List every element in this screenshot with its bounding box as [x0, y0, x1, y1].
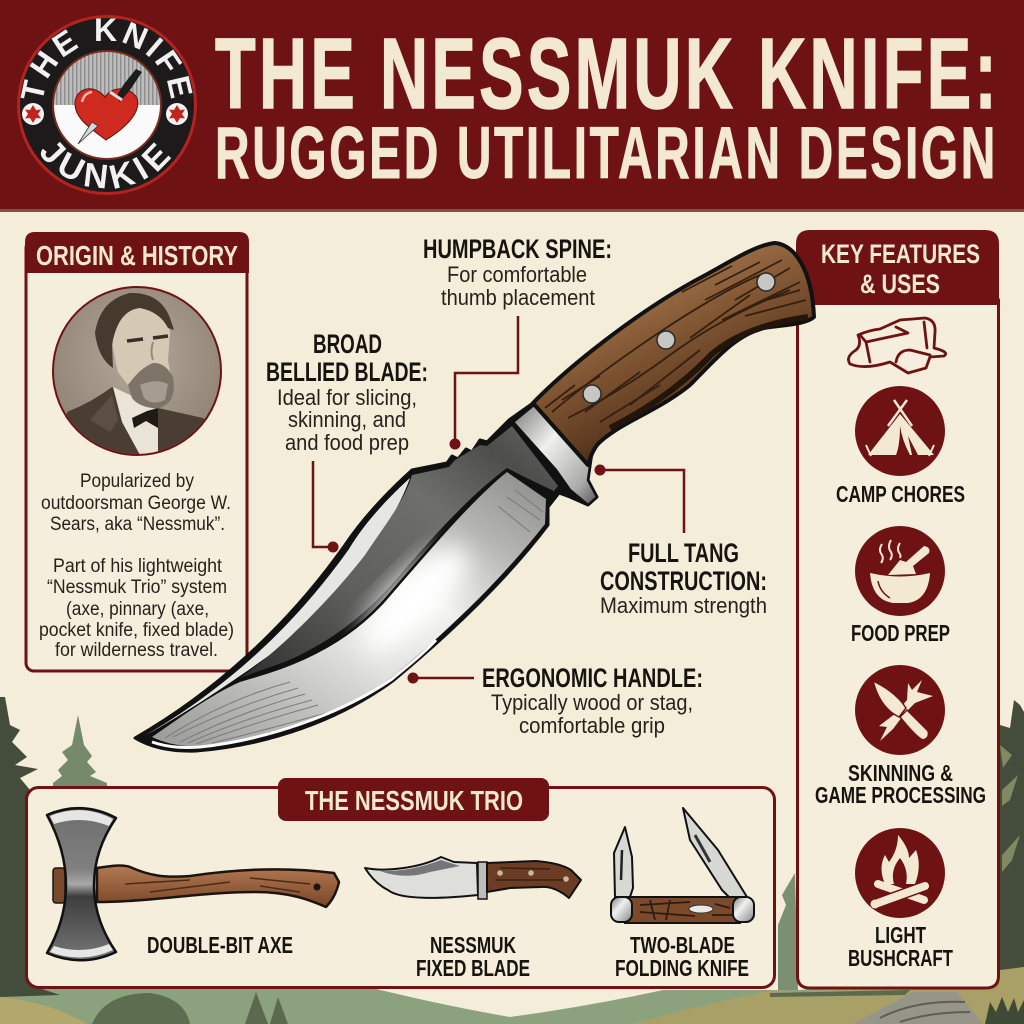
callout: humpback spine: thumb placement — [441, 285, 595, 310]
portrait of George W. Sears — [50, 284, 224, 460]
nessmuk fixed blade — [365, 857, 581, 899]
labels: trio: DOUBLE-BIT AXE — [147, 932, 293, 958]
label: camp chores: CAMP CHORES — [836, 481, 965, 507]
origin text: Popularized by — [80, 471, 194, 492]
panel: the Nessmuk trio — [26, 778, 774, 988]
origin text: “Nessmuk Trio” system — [47, 577, 227, 598]
panel: key features and uses: & USES — [860, 269, 940, 299]
label: food prep: FOOD PREP — [851, 620, 950, 646]
labels: trio: NESSMUK — [430, 932, 516, 958]
callout: broad bellied blade: BROAD — [313, 329, 382, 359]
wood handle — [533, 243, 814, 465]
callout: full tang construction: Maximum strength — [600, 593, 767, 618]
callout: ergonomic handle: Typically wood or stag, — [491, 690, 693, 715]
origin text — [39, 471, 234, 661]
callout: full tang construction — [594, 464, 767, 618]
callout: humpback spine — [423, 234, 612, 450]
origin text: outdoorsman George W. — [41, 493, 231, 514]
label: light bushcraft: BUSHCRAFT — [848, 945, 953, 971]
bright lower bevel — [152, 472, 546, 746]
callout: broad bellied blade: skinning, and — [288, 407, 406, 432]
callout: broad bellied blade: BELLIED BLADE: — [266, 357, 428, 387]
logo: The Knife Junkie: THE KNIFE — [20, 18, 192, 98]
callout: humpback spine: HUMPBACK SPINE: — [423, 234, 612, 264]
rivets — [583, 273, 775, 403]
callout: broad bellied blade — [266, 329, 428, 552]
panel: origin and history — [25, 232, 249, 671]
heading: key features: KEY FEATURES — [821, 239, 980, 269]
callout: ergonomic handle — [408, 663, 703, 738]
main knife illustration — [135, 243, 814, 751]
icon: wood and stone — [848, 318, 946, 373]
callout: humpback spine: For comfortable — [447, 262, 587, 287]
dark upper bevel — [240, 426, 558, 678]
callout: ergonomic handle: ERGONOMIC HANDLE: — [482, 663, 703, 693]
origin text: pocket knife, fixed blade) — [39, 620, 234, 641]
panel: key features and uses — [796, 230, 999, 988]
forest landscape background — [0, 697, 1024, 1024]
origin text: Sears, aka “Nessmuk”. — [50, 514, 225, 535]
two-blade folding knife — [611, 808, 754, 923]
double-bit axe — [47, 808, 339, 960]
blade silhouette — [135, 403, 597, 751]
callout: full tang construction: CONSTRUCTION: — [600, 566, 767, 596]
heading: the Nessmuk trio — [278, 778, 549, 821]
header band — [0, 0, 1024, 212]
origin text: for wilderness travel. — [55, 640, 218, 661]
icon: tent — [855, 386, 945, 476]
logo: The Knife Junkie: JUNKIE — [40, 142, 172, 189]
labels: trio: TWO-BLADE — [630, 932, 735, 958]
icon: skinning knife — [855, 665, 945, 755]
origin text: (axe, pinnary (axe, — [66, 599, 209, 620]
callout: broad bellied blade: Ideal for slicing, — [277, 385, 417, 410]
callout: full tang construction: FULL TANG — [628, 538, 739, 568]
wood grain — [545, 260, 808, 428]
icon: campfire — [855, 828, 945, 918]
heading: the Nessmuk trio: THE NESSMUK TRIO — [305, 785, 523, 816]
spine polish — [146, 478, 410, 735]
origin text: Part of his lightweight — [53, 556, 223, 577]
labels: trio: FIXED BLADE — [416, 955, 530, 981]
heading: origin and history: ORIGIN & HISTORY — [36, 240, 238, 271]
logo: The Knife Junkie — [17, 15, 197, 195]
callout: ergonomic handle: comfortable grip — [519, 713, 665, 738]
label: skinning and game processing — [815, 760, 986, 808]
label: light bushcraft — [848, 922, 953, 971]
guard — [513, 404, 597, 505]
icon: food prep bowl — [855, 526, 945, 616]
label: skinning and game processing: SKINNING & — [848, 760, 953, 786]
labels: trio — [147, 932, 749, 981]
label: light bushcraft: LIGHT — [875, 922, 926, 948]
callout: broad bellied blade: and food prep — [285, 430, 409, 455]
labels: trio: FOLDING KNIFE — [615, 955, 749, 981]
